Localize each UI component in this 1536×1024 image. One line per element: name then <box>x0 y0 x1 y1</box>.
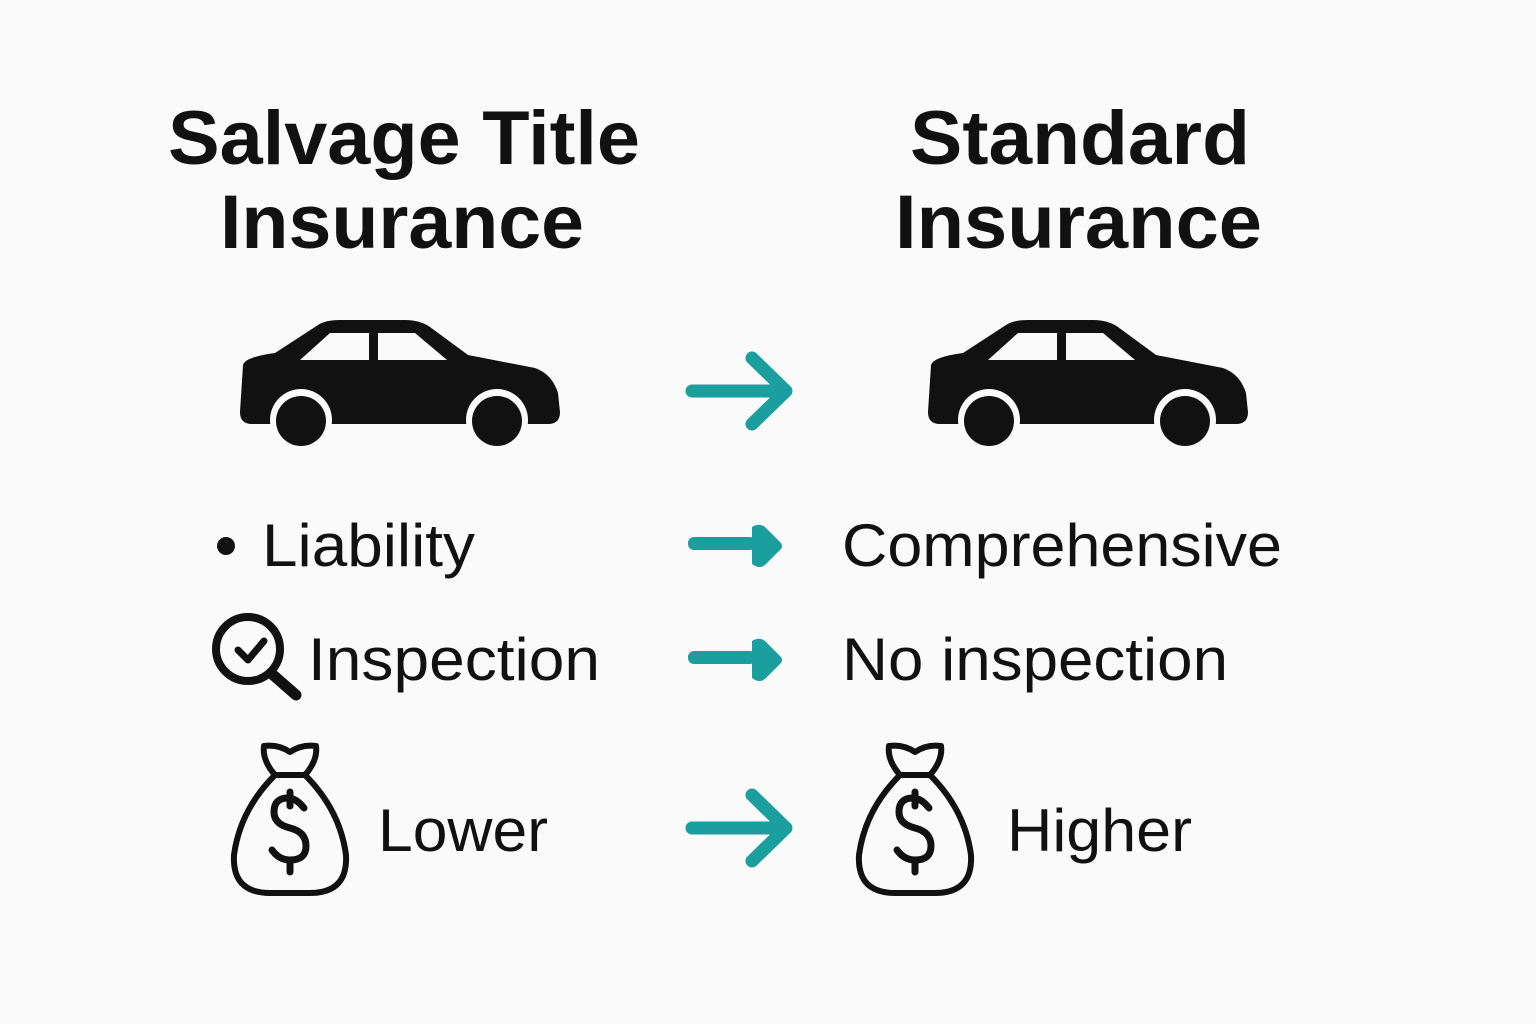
title: salvage title insurance <box>168 96 640 265</box>
title: salvage title insurance: Salvage Title <box>168 96 640 181</box>
text: inspection: Inspection <box>308 626 600 693</box>
text: liability: Liability <box>262 512 475 579</box>
arrow: car <box>692 358 786 424</box>
arrow: cost <box>692 795 786 861</box>
icon: standard car <box>928 320 1248 451</box>
title: standard insurance: Standard <box>910 96 1250 181</box>
arrow: inspection <box>688 639 782 681</box>
text: comprehensive: Comprehensive <box>842 512 1282 579</box>
icon: salvage car <box>240 320 560 451</box>
icon: money bag higher <box>859 746 971 893</box>
title: standard insurance: Insurance <box>895 180 1262 265</box>
icon: magnifier check <box>216 617 296 695</box>
title: salvage title insurance: Insurance <box>220 180 584 265</box>
arrow: coverage <box>688 525 782 567</box>
text: no inspection: No inspection <box>842 626 1228 693</box>
title: standard insurance <box>895 96 1262 265</box>
icon: money bag lower <box>234 746 346 893</box>
bullet: liability <box>217 537 235 555</box>
text: lower: Lower <box>378 797 548 864</box>
text: higher: Higher <box>1007 797 1192 864</box>
